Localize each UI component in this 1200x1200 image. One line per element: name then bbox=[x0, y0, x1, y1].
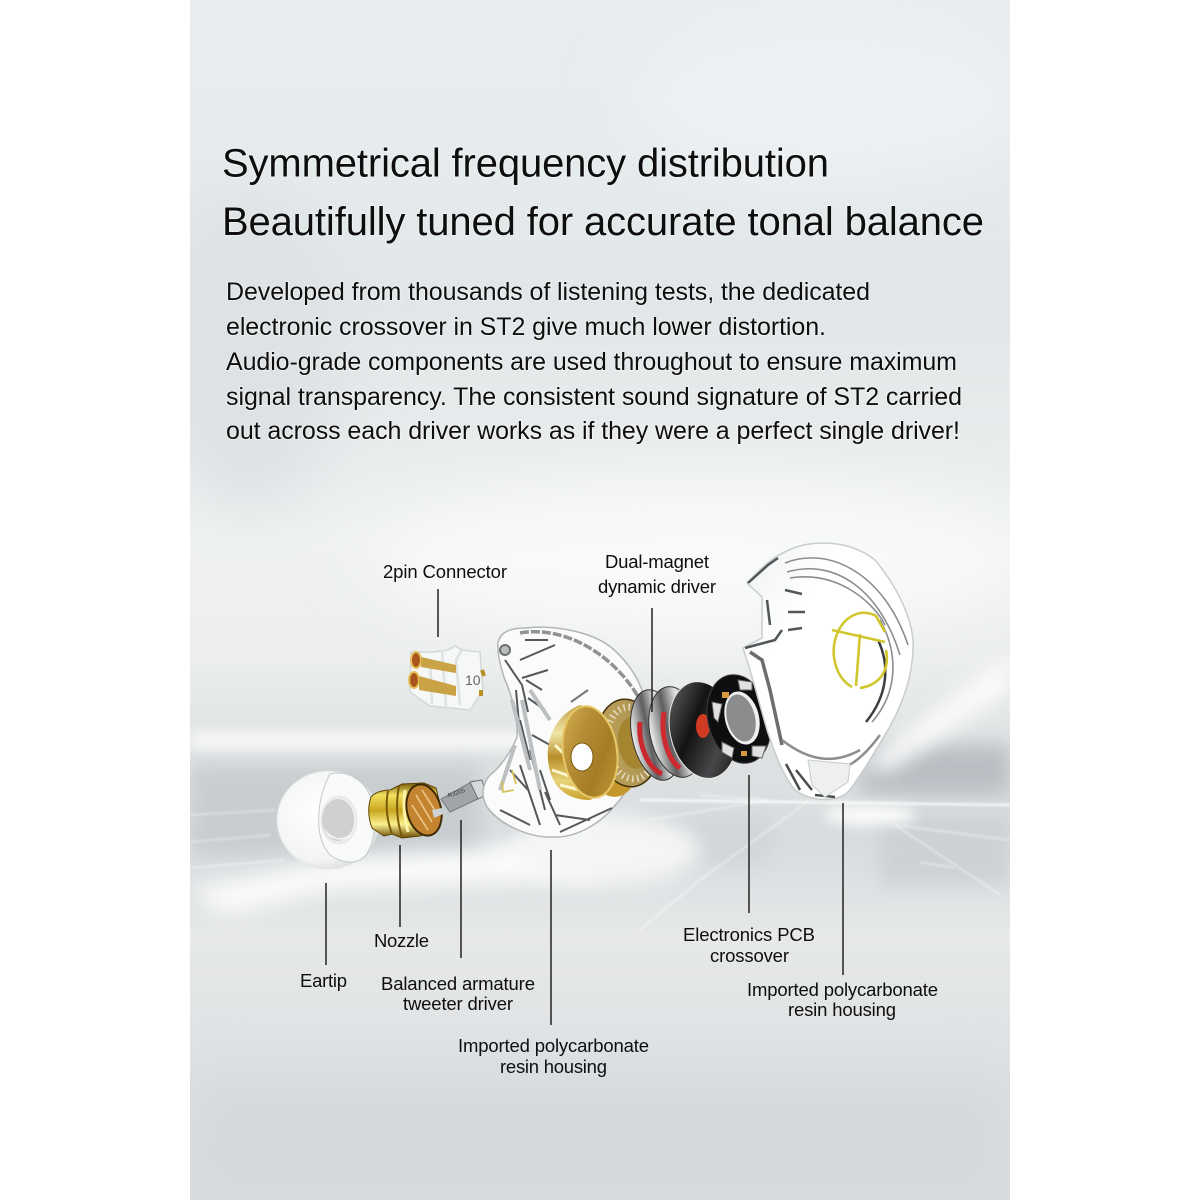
label: balanced armature tweeter driver: tweeter driver bbox=[403, 993, 513, 1014]
body text block: out across each driver works as if they were a perfect single driver! bbox=[226, 417, 960, 445]
label: imported polycarbonate resin housing (inner) bbox=[458, 1035, 649, 1077]
label: balanced armature tweeter driver: Balanced armature bbox=[381, 973, 535, 994]
label: electronics PCB crossover: Electronics PCB bbox=[683, 924, 815, 945]
heading: Symmetrical frequency distribution bbox=[222, 142, 829, 186]
label: nozzle: Nozzle bbox=[374, 930, 429, 951]
icon: balanced armature driver bbox=[441, 780, 486, 812]
icon: gold sleeve and ribbed disc bbox=[548, 695, 665, 801]
icon: inner housing shell bbox=[483, 627, 645, 837]
label: 2pin connector: 2pin Connector bbox=[383, 561, 507, 582]
label: eartip: Eartip bbox=[300, 970, 347, 991]
label: electronics PCB crossover: crossover bbox=[710, 945, 789, 966]
icon: balanced armature driver: .R3205 bbox=[446, 788, 467, 800]
label: imported polycarbonate resin housing (outer): resin housing bbox=[788, 999, 896, 1020]
heading: Beautifully tuned for accurate tonal balance bbox=[222, 200, 984, 244]
icon: eartip bbox=[277, 771, 379, 869]
body text block: Audio-grade components are used throughout to ensure maximum bbox=[226, 348, 957, 376]
label: imported polycarbonate resin housing (outer) bbox=[747, 979, 938, 1020]
icon: dual-magnet dynamic driver bbox=[623, 675, 745, 785]
label: imported polycarbonate resin housing (inner): Imported polycarbonate bbox=[458, 1035, 649, 1056]
label: balanced armature tweeter driver bbox=[381, 973, 535, 1014]
label: imported polycarbonate resin housing (inner): resin housing bbox=[500, 1056, 607, 1077]
body text block: signal transparency. The consistent sound signature of ST2 carried bbox=[226, 383, 962, 411]
background panel: silver light-streak backdrop bbox=[160, 0, 1030, 1200]
label: imported polycarbonate resin housing (outer): Imported polycarbonate bbox=[747, 979, 938, 1000]
body text block: electronic crossover in ST2 give much lower distortion. bbox=[226, 313, 826, 341]
label: dual-magnet dynamic driver bbox=[598, 551, 716, 597]
body text block bbox=[226, 278, 962, 445]
callout lines bbox=[326, 589, 843, 1025]
label: electronics PCB crossover bbox=[683, 924, 815, 966]
label: dual-magnet dynamic driver: dynamic driver bbox=[598, 576, 716, 597]
icon: outer housing shell with logo bbox=[743, 543, 913, 799]
icon: brass nozzle bbox=[369, 781, 447, 839]
icon: yellow logo bbox=[832, 613, 887, 688]
label: dual-magnet dynamic driver: Dual-magnet bbox=[605, 551, 709, 572]
icon: electronics PCB crossover bbox=[696, 668, 780, 770]
heading bbox=[222, 142, 984, 244]
body text block: Developed from thousands of listening tests, the dedicated bbox=[226, 278, 870, 306]
icon: 2pin connector bbox=[409, 646, 484, 710]
exploded earphone diagram bbox=[277, 543, 913, 869]
icon: 2pin connector: 10 bbox=[465, 672, 481, 688]
